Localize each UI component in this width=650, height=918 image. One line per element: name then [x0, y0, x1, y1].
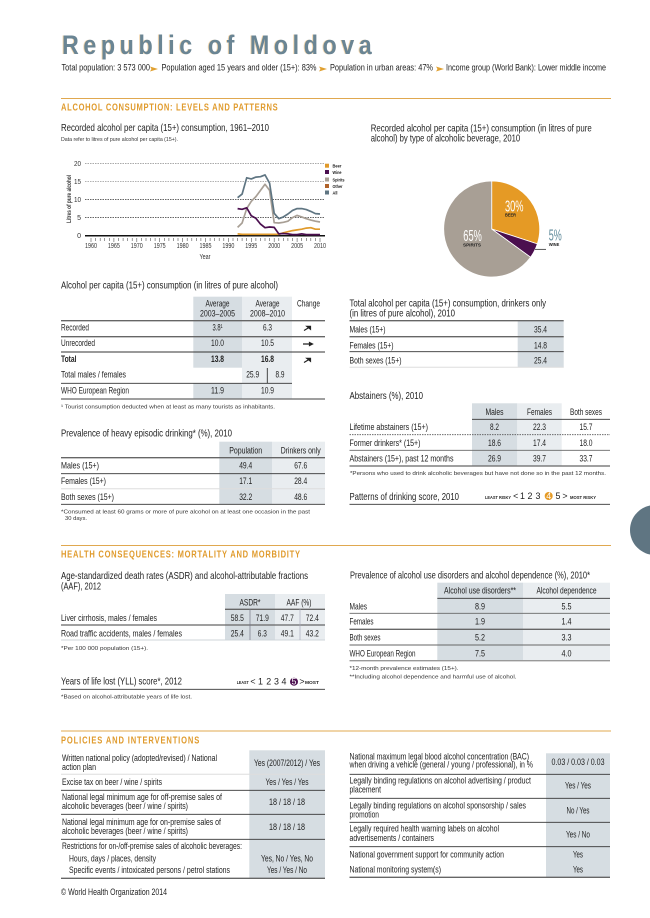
patterns of drinking score: 4 — [546, 491, 551, 501]
table: policies right: advertisements / containers — [350, 833, 434, 843]
footnote: heavy episodic definition: *Consumed at least 60 grams or more of pure alcohol on at least one occasion in the past — [61, 509, 310, 515]
table: death rates: 49.1 — [281, 629, 294, 639]
table: abstainers: 15.7 — [580, 422, 593, 432]
table: policies left: alcoholic beverages (beer / wine / spirits) — [62, 801, 188, 811]
table: policies right: Yes / Yes — [565, 780, 591, 790]
table: per capita consumption: 3.8¹ — [212, 323, 223, 333]
icon: page tab circle — [630, 505, 650, 555]
table: abstainers: Former drinkers* (15+) — [350, 438, 421, 448]
line chart: 1960 — [85, 243, 97, 250]
table heading: drinkers only — [350, 299, 547, 320]
line chart: 20 — [74, 161, 81, 168]
table: use disorders: 5.5 — [562, 601, 572, 611]
pie chart heading: alcohol) by type of alcoholic beverage, 2010 — [371, 134, 520, 145]
table heading: death rates: Age-standardized death rates (ASDR) and alcohol-attributable fractions — [61, 571, 308, 582]
table: drinkers only: 25.4 — [534, 355, 547, 365]
table: death rates: Liver cirrhosis, males / females — [61, 613, 157, 623]
table: abstainers: Males — [486, 407, 504, 417]
table: policies left: Written national policy (adopted/revised) / National — [62, 753, 217, 763]
table: use disorders — [350, 583, 610, 661]
table: per capita consumption: 8.9 — [276, 370, 285, 380]
line chart: 1975 — [154, 243, 166, 250]
table: death rates: 6.3 — [258, 629, 267, 639]
table: policies left — [61, 750, 325, 878]
pie chart: SPIRITS — [463, 243, 481, 248]
table: abstainers: Lifetime abstainers (15+) — [350, 422, 428, 432]
table: abstainers: 22.3 — [533, 422, 546, 432]
table: abstainers: Abstainers (15+), past 12 months — [350, 454, 454, 464]
table: policies right: placement — [350, 784, 381, 794]
table: per capita consumption: Change — [297, 299, 320, 309]
line chart: 1970 — [131, 243, 143, 250]
footnotes: use disorders — [350, 666, 517, 680]
table: policies left: Yes / Yes / Yes — [266, 777, 309, 787]
table: policies left: Yes, No / Yes, No — [261, 854, 313, 864]
table: death rates: AAF (%) — [286, 598, 312, 608]
patterns of drinking score: < — [513, 491, 518, 501]
table: per capita consumption — [61, 297, 325, 399]
table: abstainers: 18.0 — [580, 438, 593, 448]
chart legend: Beer — [332, 164, 342, 169]
table: policies left: Restrictions for on-/off-premise sales of alcoholic beverages: — [62, 841, 242, 851]
footnote: heavy episodic definition — [61, 509, 310, 522]
table: death rates: 71.9 — [256, 613, 269, 623]
icon: arrow up — [304, 326, 310, 330]
line chart: Litres of pure alcohol — [66, 175, 73, 223]
table: abstainers — [350, 403, 610, 466]
line chart — [66, 161, 326, 261]
icon: arrow up total — [304, 358, 310, 362]
table: policies right — [349, 751, 610, 877]
footnote: tourist consumption: ¹ Tourist consumption deducted when at least as many tourists as inhabitants. — [61, 404, 275, 410]
patterns of drinking score: Patterns of drinking score, 2010 — [350, 492, 459, 503]
table: heavy episodic drinking: Males (15+) — [61, 460, 99, 470]
line chart: 15 — [74, 179, 81, 186]
table: abstainers: 39.7 — [533, 454, 546, 464]
chart legend: Other — [332, 184, 343, 189]
section heading: alcohol consumption: ALCOHOL CONSUMPTION: LEVELS AND PATTERNS — [61, 102, 278, 113]
section heading: policies: POLICIES AND INTERVENTIONS — [61, 734, 199, 746]
table: per capita consumption: 10.9 — [261, 385, 274, 395]
table: drinkers only: Both sexes (15+) — [350, 355, 402, 365]
table: policies left: 18 / 18 / 18 — [269, 822, 305, 832]
table: use disorders: 5.2 — [475, 633, 485, 643]
country facts line: Population aged 15 years and older (15+): 83% — [162, 62, 316, 72]
footnotes: use disorders: **Including alcohol dependence and harmful use of alcohol. — [350, 674, 517, 680]
patterns of drinking score — [350, 491, 610, 504]
line chart note: Data refer to litres of pure alcohol per capita (15+). — [61, 137, 178, 143]
table: policies left: Yes (2007/2012) / Yes — [254, 758, 320, 768]
chart legend: All — [332, 190, 338, 196]
table: heavy episodic drinking: 32.2 — [239, 492, 252, 502]
table: per capita consumption: 16.8 — [261, 354, 274, 364]
table: use disorders: Alcohol use disorders** — [444, 585, 516, 595]
pie chart: WINE — [549, 242, 559, 247]
line chart heading: Recorded alcohol per capita (15+) consumption, 1961–2010 — [61, 123, 269, 134]
table heading: death rates — [61, 571, 308, 592]
table: policies left: alcoholic beverages (beer / wine / spirits) — [62, 826, 188, 836]
table: policies left: Excise tax on beer / wine / spirits — [62, 777, 162, 787]
table: heavy episodic drinking: 28.4 — [294, 476, 307, 486]
table: per capita consumption: 6.3 — [263, 323, 272, 333]
table: per capita consumption: 11.9 — [211, 385, 224, 395]
table: policies left: Specific events / intoxicated persons / petrol stations — [69, 865, 230, 875]
table: policies left: National legal minimum age for on-premise sales of — [62, 817, 221, 827]
patterns of drinking score: 2 — [528, 491, 533, 501]
pie chart: 5% — [549, 228, 562, 245]
patterns of drinking score: 5 — [556, 491, 561, 501]
line chart: 1995 — [245, 243, 257, 250]
years of life lost score: 4 — [282, 676, 287, 686]
table: policies left: National legal minimum age for off-premise sales of — [62, 792, 222, 802]
years of life lost score: > — [299, 676, 305, 686]
table: per capita consumption: 10.0 — [211, 338, 224, 348]
table: use disorders: 7.5 — [475, 649, 485, 659]
table: death rates: 72.4 — [306, 613, 319, 623]
table: heavy episodic drinking: 48.6 — [294, 492, 307, 502]
table: use disorders: Females — [350, 616, 374, 626]
table heading: abstainers: Abstainers (%), 2010 — [350, 391, 423, 402]
table: use disorders: 4.0 — [562, 649, 572, 659]
table: drinkers only: Males (15+) — [350, 325, 386, 335]
table: per capita consumption: Total — [61, 354, 76, 364]
table: use disorders: Alcohol dependence — [536, 585, 597, 595]
line chart: 1980 — [177, 243, 189, 250]
table heading: death rates: (AAF), 2012 — [61, 581, 101, 592]
years of life lost score: 2 — [266, 676, 271, 686]
table: policies right: Legally required health warning labels on alcohol — [350, 824, 499, 834]
table: use disorders: Both sexes — [350, 633, 381, 643]
table: policies right: 0.03 / 0.03 / 0.03 — [552, 757, 605, 767]
chart legend: Wine — [332, 170, 342, 175]
table: policies left: 18 / 18 / 18 — [269, 797, 305, 807]
table: policies left: Yes / Yes / No — [267, 865, 307, 875]
chart legend — [325, 164, 345, 196]
years of life lost score: 3 — [274, 676, 279, 686]
table: drinkers only: 35.4 — [534, 325, 547, 335]
country facts line: Income group (World Bank): Lower middle income — [446, 62, 606, 72]
table: policies right: Yes / No — [566, 829, 590, 839]
line chart: 1985 — [200, 243, 212, 250]
table: heavy episodic drinking: 67.6 — [294, 460, 307, 470]
table: heavy episodic drinking — [61, 442, 325, 504]
table: per capita consumption: Average — [206, 299, 230, 309]
years of life lost score: MOST — [305, 680, 319, 685]
country facts line: Population in urban areas: 47% — [330, 62, 433, 72]
table: policies right: National monitoring system(s) — [350, 864, 441, 874]
years of life lost score: Years of life lost (YLL) score*, 2012 — [61, 676, 182, 687]
table: policies right: Yes — [573, 864, 583, 874]
table: drinkers only — [350, 321, 564, 367]
table: per capita consumption: Total males / females — [61, 370, 126, 380]
years of life lost score: LEAST — [237, 680, 249, 685]
table: drinkers only: 14.8 — [534, 340, 547, 350]
pie chart heading — [371, 124, 592, 145]
table: heavy episodic drinking: Drinkers only — [281, 445, 321, 455]
years of life lost score — [61, 676, 325, 689]
table: use disorders: WHO European Region — [350, 649, 416, 659]
table: abstainers: 18.6 — [488, 438, 501, 448]
table: death rates: 25.4 — [231, 629, 244, 639]
table: per capita consumption: Average — [256, 299, 280, 309]
table: death rates: ASDR* — [240, 598, 261, 608]
table: use disorders: 1.4 — [562, 616, 572, 626]
years of life lost score: 1 — [258, 676, 263, 686]
table: per capita consumption: Unrecorded — [61, 338, 95, 348]
years of life lost score: < — [250, 676, 256, 686]
table heading: heavy episodic drinking: Prevalence of heavy episodic drinking* (%), 2010 — [61, 429, 232, 440]
pie chart — [444, 181, 562, 277]
line chart: 1990 — [222, 243, 234, 250]
table: abstainers: 26.9 — [488, 454, 501, 464]
footnote: heavy episodic definition: 30 days. — [65, 516, 87, 522]
table heading: drinkers only: (in litres of pure alcohol), 2010 — [350, 309, 455, 320]
table: abstainers: 33.7 — [580, 454, 593, 464]
pie chart: 65% — [463, 228, 482, 245]
table: abstainers: 17.4 — [533, 438, 546, 448]
pie chart heading: Recorded alcohol per capita (15+) consumption (in litres of pure — [371, 124, 592, 135]
table: death rates: 43.2 — [306, 629, 319, 639]
table: policies right: Legally binding regulations on alcohol advertising / product — [350, 775, 531, 785]
footnote: YLL: *Based on alcohol-attributable years of life lost. — [61, 694, 192, 700]
table: use disorders: Males — [350, 601, 367, 611]
table: death rates: 47.7 — [281, 613, 294, 623]
table: per capita consumption: 2008–2010 — [250, 309, 285, 319]
footer copyright: © World Health Organization 2014 — [61, 887, 167, 897]
line chart: Year — [200, 254, 211, 261]
table: death rates — [61, 594, 325, 640]
table: abstainers: Females — [527, 407, 552, 417]
section heading: health consequences: HEALTH CONSEQUENCES: MORTALITY AND MORBIDITY — [61, 548, 300, 560]
table: death rates: Road traffic accidents, males / females — [61, 629, 182, 639]
footnotes: use disorders: *12-month prevalence estimates (15+). — [350, 666, 459, 672]
table: death rates: 58.5 — [231, 613, 244, 623]
table: policies right: promotion — [350, 809, 379, 819]
table: heavy episodic drinking: Both sexes (15+) — [61, 492, 114, 502]
line chart: 2010 — [314, 243, 326, 250]
icon: score 4 marker — [545, 492, 553, 500]
table: use disorders: 3.3 — [562, 633, 572, 643]
table heading: per capita consumption: Alcohol per capita (15+) consumption (in litres of pure alcohol) — [61, 280, 278, 292]
table: heavy episodic drinking: Females (15+) — [61, 476, 106, 486]
table: heavy episodic drinking: 49.4 — [239, 460, 252, 470]
table: abstainers: Both sexes — [570, 407, 602, 417]
line chart: 2005 — [291, 243, 303, 250]
chart legend: Spirits — [332, 178, 345, 182]
line chart: 5 — [77, 215, 81, 222]
title: Republic of Moldova — [62, 31, 373, 60]
table: policies right: Legally binding regulations on alcohol sponsorship / sales — [350, 800, 526, 810]
pie chart: 30% — [505, 199, 524, 216]
country facts line — [62, 62, 606, 72]
patterns of drinking score: LEAST RISKY — [485, 495, 511, 500]
table: policies right: No / Yes — [566, 805, 590, 815]
table: per capita consumption: WHO European Region — [61, 385, 129, 395]
footnote: former drinkers: *Persons who used to drink alcoholic beverages but have not done so in the past 12 months. — [350, 471, 606, 477]
table: use disorders: 1.9 — [475, 616, 485, 626]
table: per capita consumption: 13.8 — [211, 354, 224, 364]
line chart: 1965 — [108, 243, 120, 250]
table: per capita consumption: 10.5 — [261, 338, 274, 348]
table: abstainers: 8.2 — [490, 422, 499, 432]
table: policies left: action plan — [62, 762, 96, 772]
table: policies left: Hours, days / places, density — [69, 854, 156, 864]
patterns of drinking score: MOST RISKY — [570, 495, 596, 500]
table: heavy episodic drinking: 17.1 — [239, 476, 252, 486]
table: policies right: National maximum legal blood alcohol concentration (BAC) — [350, 751, 529, 761]
table heading: drinkers only: Total alcohol per capita (15+) consumption, drinkers only — [350, 299, 547, 310]
table: policies right: National government support for community action — [350, 849, 504, 859]
patterns of drinking score: 1 — [520, 491, 525, 501]
table: use disorders: 8.9 — [475, 601, 485, 611]
table: per capita consumption: 2003–2005 — [200, 309, 235, 319]
table: heavy episodic drinking: Population — [229, 445, 262, 455]
patterns of drinking score: > — [562, 491, 568, 501]
pie chart: BEER — [505, 213, 517, 218]
country facts line: Total population: 3 573 000 — [62, 62, 150, 72]
table: per capita consumption: 25.9 — [246, 370, 259, 380]
table: per capita consumption: Recorded — [61, 323, 89, 333]
table: drinkers only: Females (15+) — [350, 340, 394, 350]
line chart: 0 — [77, 233, 81, 240]
footnote: per 100 000: *Per 100 000 population (15+). — [61, 646, 148, 652]
line chart: 10 — [74, 197, 81, 204]
years of life lost score: 5 — [292, 676, 297, 686]
table: policies right: when driving a vehicle (general / young / professional), in % — [349, 760, 533, 770]
icon: score 5 marker — [290, 678, 298, 686]
patterns of drinking score: 3 — [536, 491, 541, 501]
line chart: 2000 — [268, 243, 280, 250]
icon: arrow right — [303, 342, 312, 346]
table: policies right: Yes — [573, 849, 583, 859]
